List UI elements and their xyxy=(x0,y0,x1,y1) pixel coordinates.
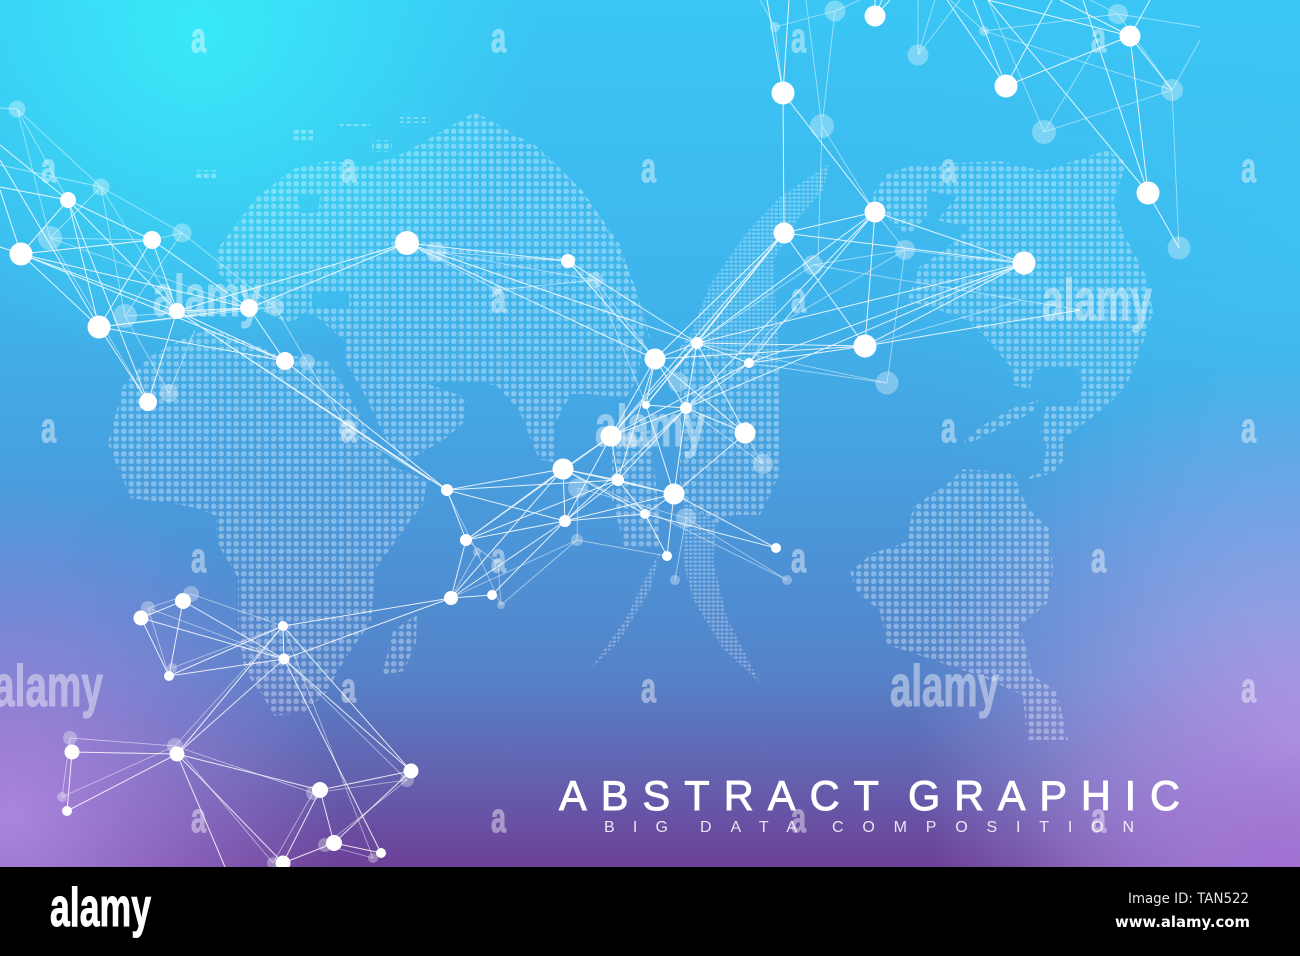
small watermark marks: a xyxy=(191,534,206,581)
dotted world map: right globe xyxy=(680,150,1153,740)
small watermark marks: a xyxy=(41,404,56,451)
small watermark marks: a xyxy=(641,664,656,711)
large watermark: centre: alamy xyxy=(595,394,705,459)
large watermark: top right: alamy xyxy=(1042,268,1152,333)
subtitle xyxy=(604,819,1134,836)
Arabia xyxy=(345,345,467,463)
small watermark marks: a xyxy=(491,794,506,841)
left long links xyxy=(0,145,697,490)
small watermark marks: a xyxy=(341,144,356,191)
lower left links xyxy=(67,601,411,867)
small watermark marks: a xyxy=(191,14,206,61)
arc band lower left xyxy=(589,553,660,671)
title xyxy=(559,772,1180,819)
title: ABSTRACT xyxy=(559,772,879,819)
subtitle: DATA xyxy=(700,819,797,836)
small watermark marks: a xyxy=(791,794,806,841)
small watermark marks: a xyxy=(941,144,956,191)
outer arc xyxy=(534,145,650,340)
small watermark marks: a xyxy=(791,534,806,581)
subtitle: BIG xyxy=(604,819,668,836)
Madagascar xyxy=(382,614,417,675)
large watermark: top left: alamy xyxy=(153,264,261,329)
Africa xyxy=(108,329,427,716)
South America xyxy=(850,469,1068,740)
top right cluster links xyxy=(767,0,1179,248)
Caribbean strand xyxy=(963,400,1038,446)
small watermark marks: a xyxy=(341,664,356,711)
central hub links xyxy=(563,343,776,556)
arc band: upper crescent xyxy=(680,163,830,370)
small watermark marks: a xyxy=(191,794,206,841)
small watermark marks: a xyxy=(491,274,506,321)
small watermark marks: a xyxy=(41,144,56,191)
small watermark marks: a xyxy=(1241,144,1256,191)
central right links xyxy=(611,212,1080,436)
lower central links xyxy=(283,436,618,659)
dotted world map: left globe xyxy=(108,112,662,716)
subtitle: COMPOSITION xyxy=(832,819,1134,836)
footer logo: alamy xyxy=(50,876,151,938)
Southeast Asia xyxy=(612,430,662,548)
small watermark marks: a xyxy=(791,274,806,321)
small watermark marks: a xyxy=(791,14,806,61)
image id: Image ID: TAN522 xyxy=(1128,891,1249,907)
small watermark marks: a xyxy=(1241,404,1256,451)
website: www.alamy.com xyxy=(1115,913,1250,931)
small watermark marks: a xyxy=(1091,794,1106,841)
small watermark marks: a xyxy=(1091,534,1106,581)
small watermark marks: a xyxy=(491,534,506,581)
globe block lower xyxy=(680,347,780,523)
title: GRAPHIC xyxy=(908,772,1180,819)
northern islands xyxy=(195,117,430,178)
arc band: lower crescent xyxy=(683,500,760,683)
small watermark marks: a xyxy=(491,14,506,61)
small watermark marks: a xyxy=(641,144,656,191)
small watermark marks: a xyxy=(1241,664,1256,711)
small watermark marks: a xyxy=(941,404,956,451)
large watermark: lower right: alamy xyxy=(890,654,999,719)
small watermark marks: a xyxy=(1091,14,1106,61)
small watermark marks: a xyxy=(341,404,356,451)
Eurasia xyxy=(216,112,645,463)
North America xyxy=(873,150,1153,481)
footer bar xyxy=(0,867,1300,956)
